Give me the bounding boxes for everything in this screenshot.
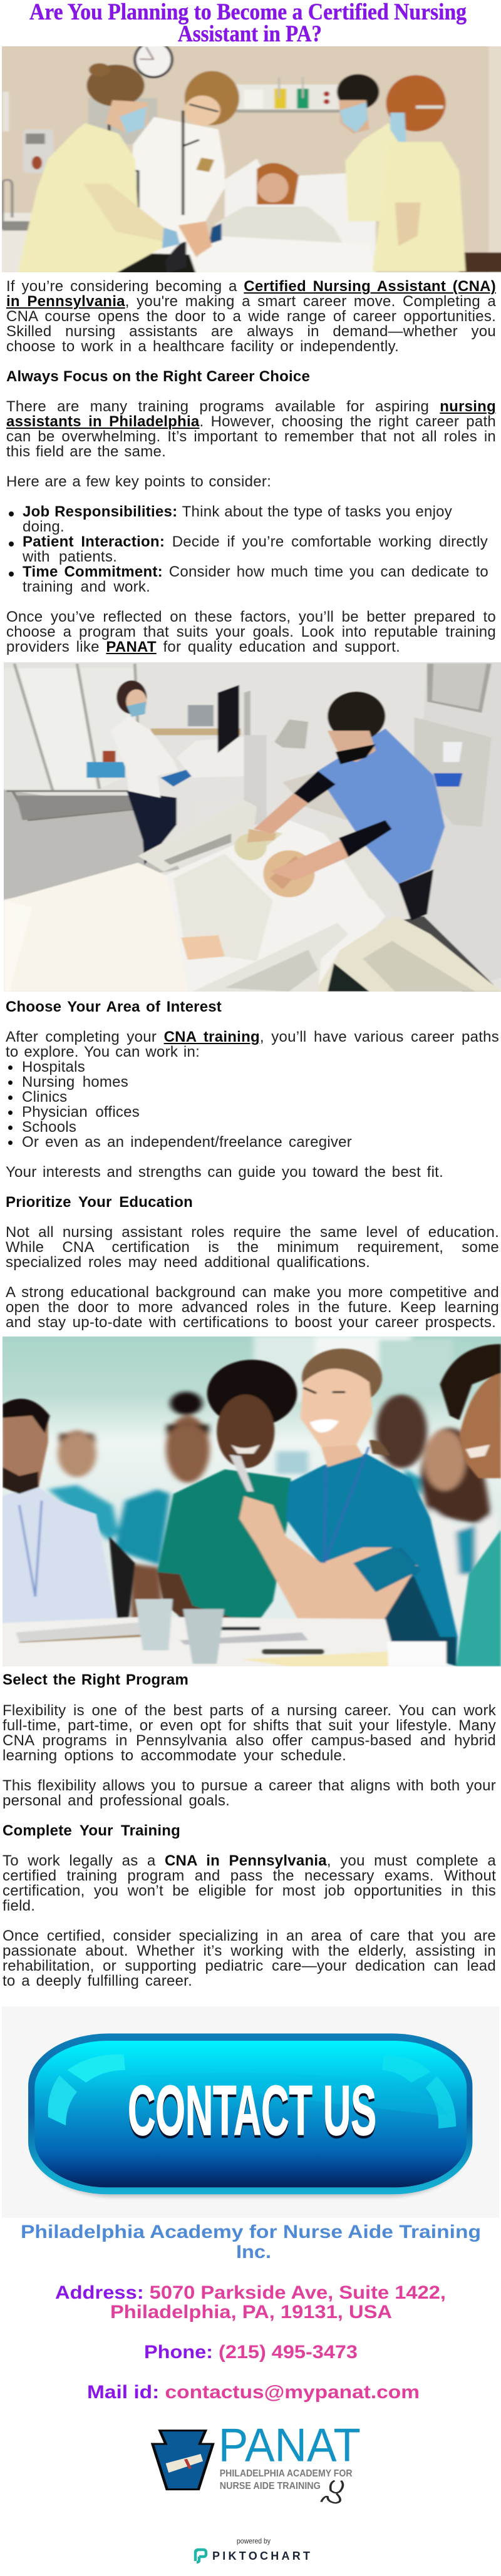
organisation name: Philadelphia Academy for Nurse Aide Training — [21, 2222, 481, 2242]
logo: PANAT — [0, 2285, 501, 2517]
photo: nurses around a hospital bed — [2, 46, 501, 272]
organisation name: Inc. — [236, 2242, 271, 2262]
paragraph: once you've reflected — [6, 610, 496, 655]
paragraph: flexibility allows — [3, 1778, 496, 1809]
paragraph: after completing — [6, 1030, 499, 1060]
paragraph: not all roles — [6, 1225, 499, 1270]
title — [29, 0, 467, 46]
footer: powered by piktochart — [0, 2532, 501, 2576]
logo subtitle: NURSE AIDE TRAINING — [220, 2481, 321, 2491]
logo wordmark: PANAT — [219, 2419, 361, 2471]
button pill — [28, 2033, 472, 2194]
organisation name — [21, 2222, 481, 2262]
address: Philadelphia, PA, 19131, USA — [110, 2302, 392, 2322]
bullet list: key points — [9, 505, 488, 595]
bullet list: workplaces — [8, 1060, 352, 1150]
title: Assistant in PA? — [178, 21, 322, 46]
button label — [128, 2071, 376, 2152]
address: Address: 5070 Parkside Ave, Suite 1422, — [55, 2282, 446, 2303]
piktochart wordmark: PIKTOCHART — [212, 2550, 310, 2562]
paragraph: flexibility — [3, 1703, 496, 1763]
email: Mail id: contactus@mypanat.com — [87, 2382, 420, 2403]
panel: contact us button — [2, 2006, 499, 2218]
icon: keystone with diploma — [153, 2431, 213, 2490]
powered by: powered by — [237, 2537, 271, 2545]
logo subtitle — [220, 2468, 353, 2491]
paragraph: once certified — [3, 1929, 496, 1989]
address — [55, 2282, 446, 2322]
photo: nurse training on a mannequin — [4, 662, 501, 992]
photo: nursing students in a classroom — [3, 1337, 501, 1666]
paragraph: to work legally — [3, 1854, 496, 1914]
phone: Phone: (215) 495-3473 — [144, 2342, 358, 2363]
contact details — [0, 2219, 501, 2410]
logo subtitle: PHILADELPHIA ACADEMY FOR — [220, 2468, 353, 2479]
icon: piktochart mark — [195, 2550, 206, 2562]
paragraph: strong educational background — [6, 1285, 499, 1330]
paragraph: training programs — [6, 399, 496, 459]
intro paragraph — [6, 279, 496, 354]
icon: stethoscope — [321, 2481, 343, 2503]
